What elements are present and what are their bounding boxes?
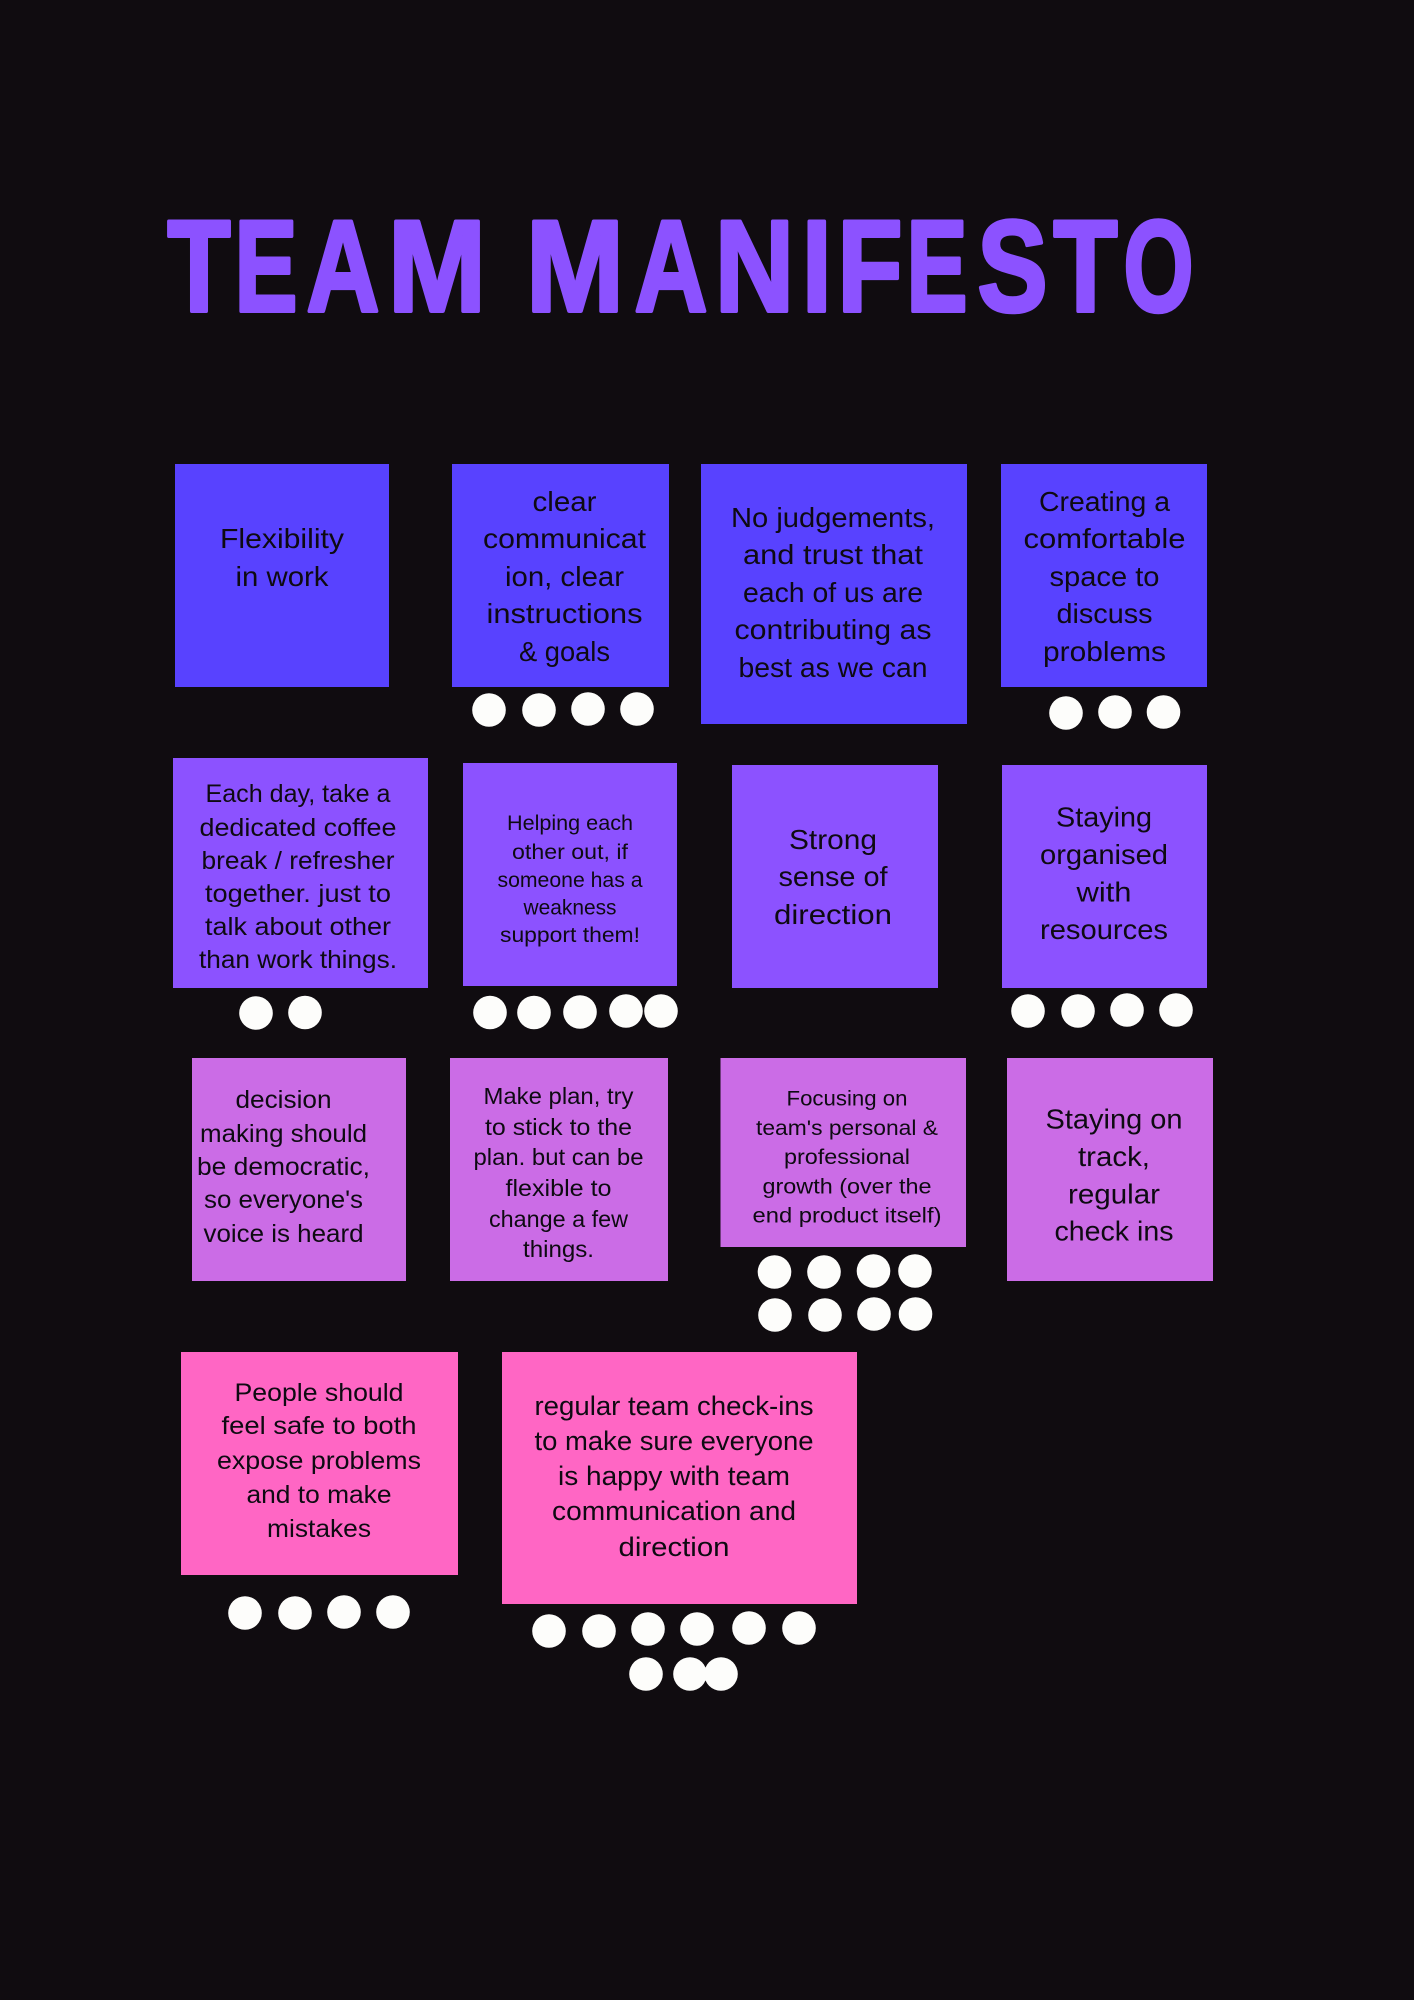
card: sense of direction xyxy=(732,765,938,988)
card: coffee break xyxy=(173,758,428,988)
card: democratic decisions: voice is heard xyxy=(204,1220,364,1248)
votes: team growth xyxy=(758,1254,932,1332)
card: clear communication: instructions xyxy=(486,598,642,629)
card: make a plan xyxy=(450,1058,668,1281)
card: feel safe: People should xyxy=(234,1379,404,1407)
card: staying on track: check ins xyxy=(1054,1216,1174,1246)
card: feel safe: feel safe to both xyxy=(222,1412,416,1440)
title: N xyxy=(715,193,794,339)
card: coffee break: Each day, take a xyxy=(206,780,391,808)
card: comfortable space xyxy=(1001,464,1207,687)
card: staying on track: Staying on xyxy=(1046,1104,1182,1134)
card: democratic decisions: making should xyxy=(200,1120,367,1148)
card: comfortable space: Creating a xyxy=(1039,486,1170,517)
card: coffee break: together. just to xyxy=(205,880,391,908)
card: team growth: growth (over the xyxy=(762,1174,932,1198)
title: E xyxy=(234,193,298,339)
card: democratic decisions: so everyone's xyxy=(204,1186,363,1214)
card: no judgements xyxy=(701,464,967,724)
card: feel safe: and to make xyxy=(246,1481,392,1509)
card: helping each other: weakness xyxy=(523,896,616,920)
card: feel safe xyxy=(181,1352,458,1575)
card: organised resources: Staying xyxy=(1056,802,1152,832)
card: make a plan: plan. but can be xyxy=(474,1144,644,1170)
card: regular check-ins: to make sure everyone xyxy=(534,1426,814,1456)
card: clear communication: ion, clear xyxy=(505,561,624,592)
card: no judgements: each of us are xyxy=(743,577,923,608)
card: regular check-ins: communication and xyxy=(552,1496,796,1526)
card: team growth: Focusing on xyxy=(786,1086,908,1110)
votes: helping each other xyxy=(473,994,678,1029)
card: make a plan: to stick to the xyxy=(485,1114,632,1140)
title: A xyxy=(634,193,708,339)
card: team growth: end product itself) xyxy=(752,1204,942,1228)
card: democratic decisions: be democratic, xyxy=(197,1153,370,1181)
title: T xyxy=(1054,193,1118,339)
card: sense of direction: direction xyxy=(774,899,892,930)
title: E xyxy=(906,193,968,339)
card: regular check-ins xyxy=(502,1352,857,1604)
card: make a plan: flexible to xyxy=(506,1175,612,1201)
card: comfortable space: discuss xyxy=(1056,598,1152,629)
card: flexibility in work: Flexibility xyxy=(220,523,344,554)
card: coffee break: break / refresher xyxy=(202,847,394,875)
card: no judgements: best as we can xyxy=(738,652,928,683)
card: organised resources: with xyxy=(1075,876,1132,908)
card: comfortable space: space to xyxy=(1050,561,1160,592)
card: make a plan: things. xyxy=(523,1236,594,1262)
card: clear communication: & goals xyxy=(519,636,610,667)
title: M xyxy=(526,193,624,339)
card: flexibility in work xyxy=(175,464,389,687)
card: comfortable space: comfortable xyxy=(1024,523,1186,554)
title: I xyxy=(802,193,832,339)
votes: coffee break xyxy=(239,996,322,1030)
card: staying on track: track, xyxy=(1078,1141,1150,1172)
card: make a plan: Make plan, try xyxy=(484,1083,634,1109)
title: S xyxy=(978,193,1048,339)
card: organised resources: resources xyxy=(1040,914,1168,945)
card: sense of direction: sense of xyxy=(778,861,888,892)
card: staying on track xyxy=(1007,1058,1213,1281)
votes: clear communication xyxy=(472,692,654,727)
card: feel safe: expose problems xyxy=(217,1447,421,1475)
card: coffee break: dedicated coffee xyxy=(200,814,396,842)
card: organised resources xyxy=(1002,765,1207,988)
votes: feel safe xyxy=(228,1595,410,1630)
card: democratic decisions xyxy=(192,1058,406,1281)
card: organised resources: organised xyxy=(1040,839,1168,870)
card: helping each other xyxy=(463,763,677,986)
card: democratic decisions: decision xyxy=(236,1086,332,1114)
card: regular check-ins: is happy with team xyxy=(558,1461,790,1491)
card: helping each other: Helping each xyxy=(507,811,633,835)
card: staying on track: regular xyxy=(1068,1178,1160,1210)
card: helping each other: someone has a xyxy=(498,868,643,892)
card: clear communication: clear xyxy=(532,486,596,517)
title: F xyxy=(838,193,902,339)
card: no judgements: No judgements, xyxy=(731,502,935,533)
card: regular check-ins: regular team check-ins xyxy=(534,1391,814,1421)
card: flexibility in work: in work xyxy=(236,561,330,592)
card: feel safe: mistakes xyxy=(267,1515,371,1543)
card: team growth: team's personal & xyxy=(756,1116,938,1140)
votes: organised resources xyxy=(1011,993,1193,1028)
card: helping each other: other out, if xyxy=(512,840,628,864)
card: team growth xyxy=(720,1058,966,1247)
card: no judgements: contributing as xyxy=(734,614,932,645)
card: team growth: professional xyxy=(784,1145,910,1169)
card: comfortable space: problems xyxy=(1043,636,1166,667)
card: sense of direction: Strong xyxy=(789,824,877,855)
card: regular check-ins: direction xyxy=(618,1532,730,1562)
card: coffee break: talk about other xyxy=(205,913,391,941)
title: T xyxy=(168,193,230,339)
votes: comfortable space xyxy=(1049,695,1180,730)
card: no judgements: and trust that xyxy=(743,539,923,570)
card: clear communication xyxy=(452,464,669,687)
card: clear communication: communicat xyxy=(483,523,646,554)
card: coffee break: than work things. xyxy=(199,946,397,974)
title: O xyxy=(1124,193,1194,339)
title: A xyxy=(306,193,380,339)
votes: regular check-ins xyxy=(532,1611,816,1691)
title: M xyxy=(388,193,486,339)
card: make a plan: change a few xyxy=(489,1206,629,1232)
card: helping each other: support them! xyxy=(500,923,640,947)
